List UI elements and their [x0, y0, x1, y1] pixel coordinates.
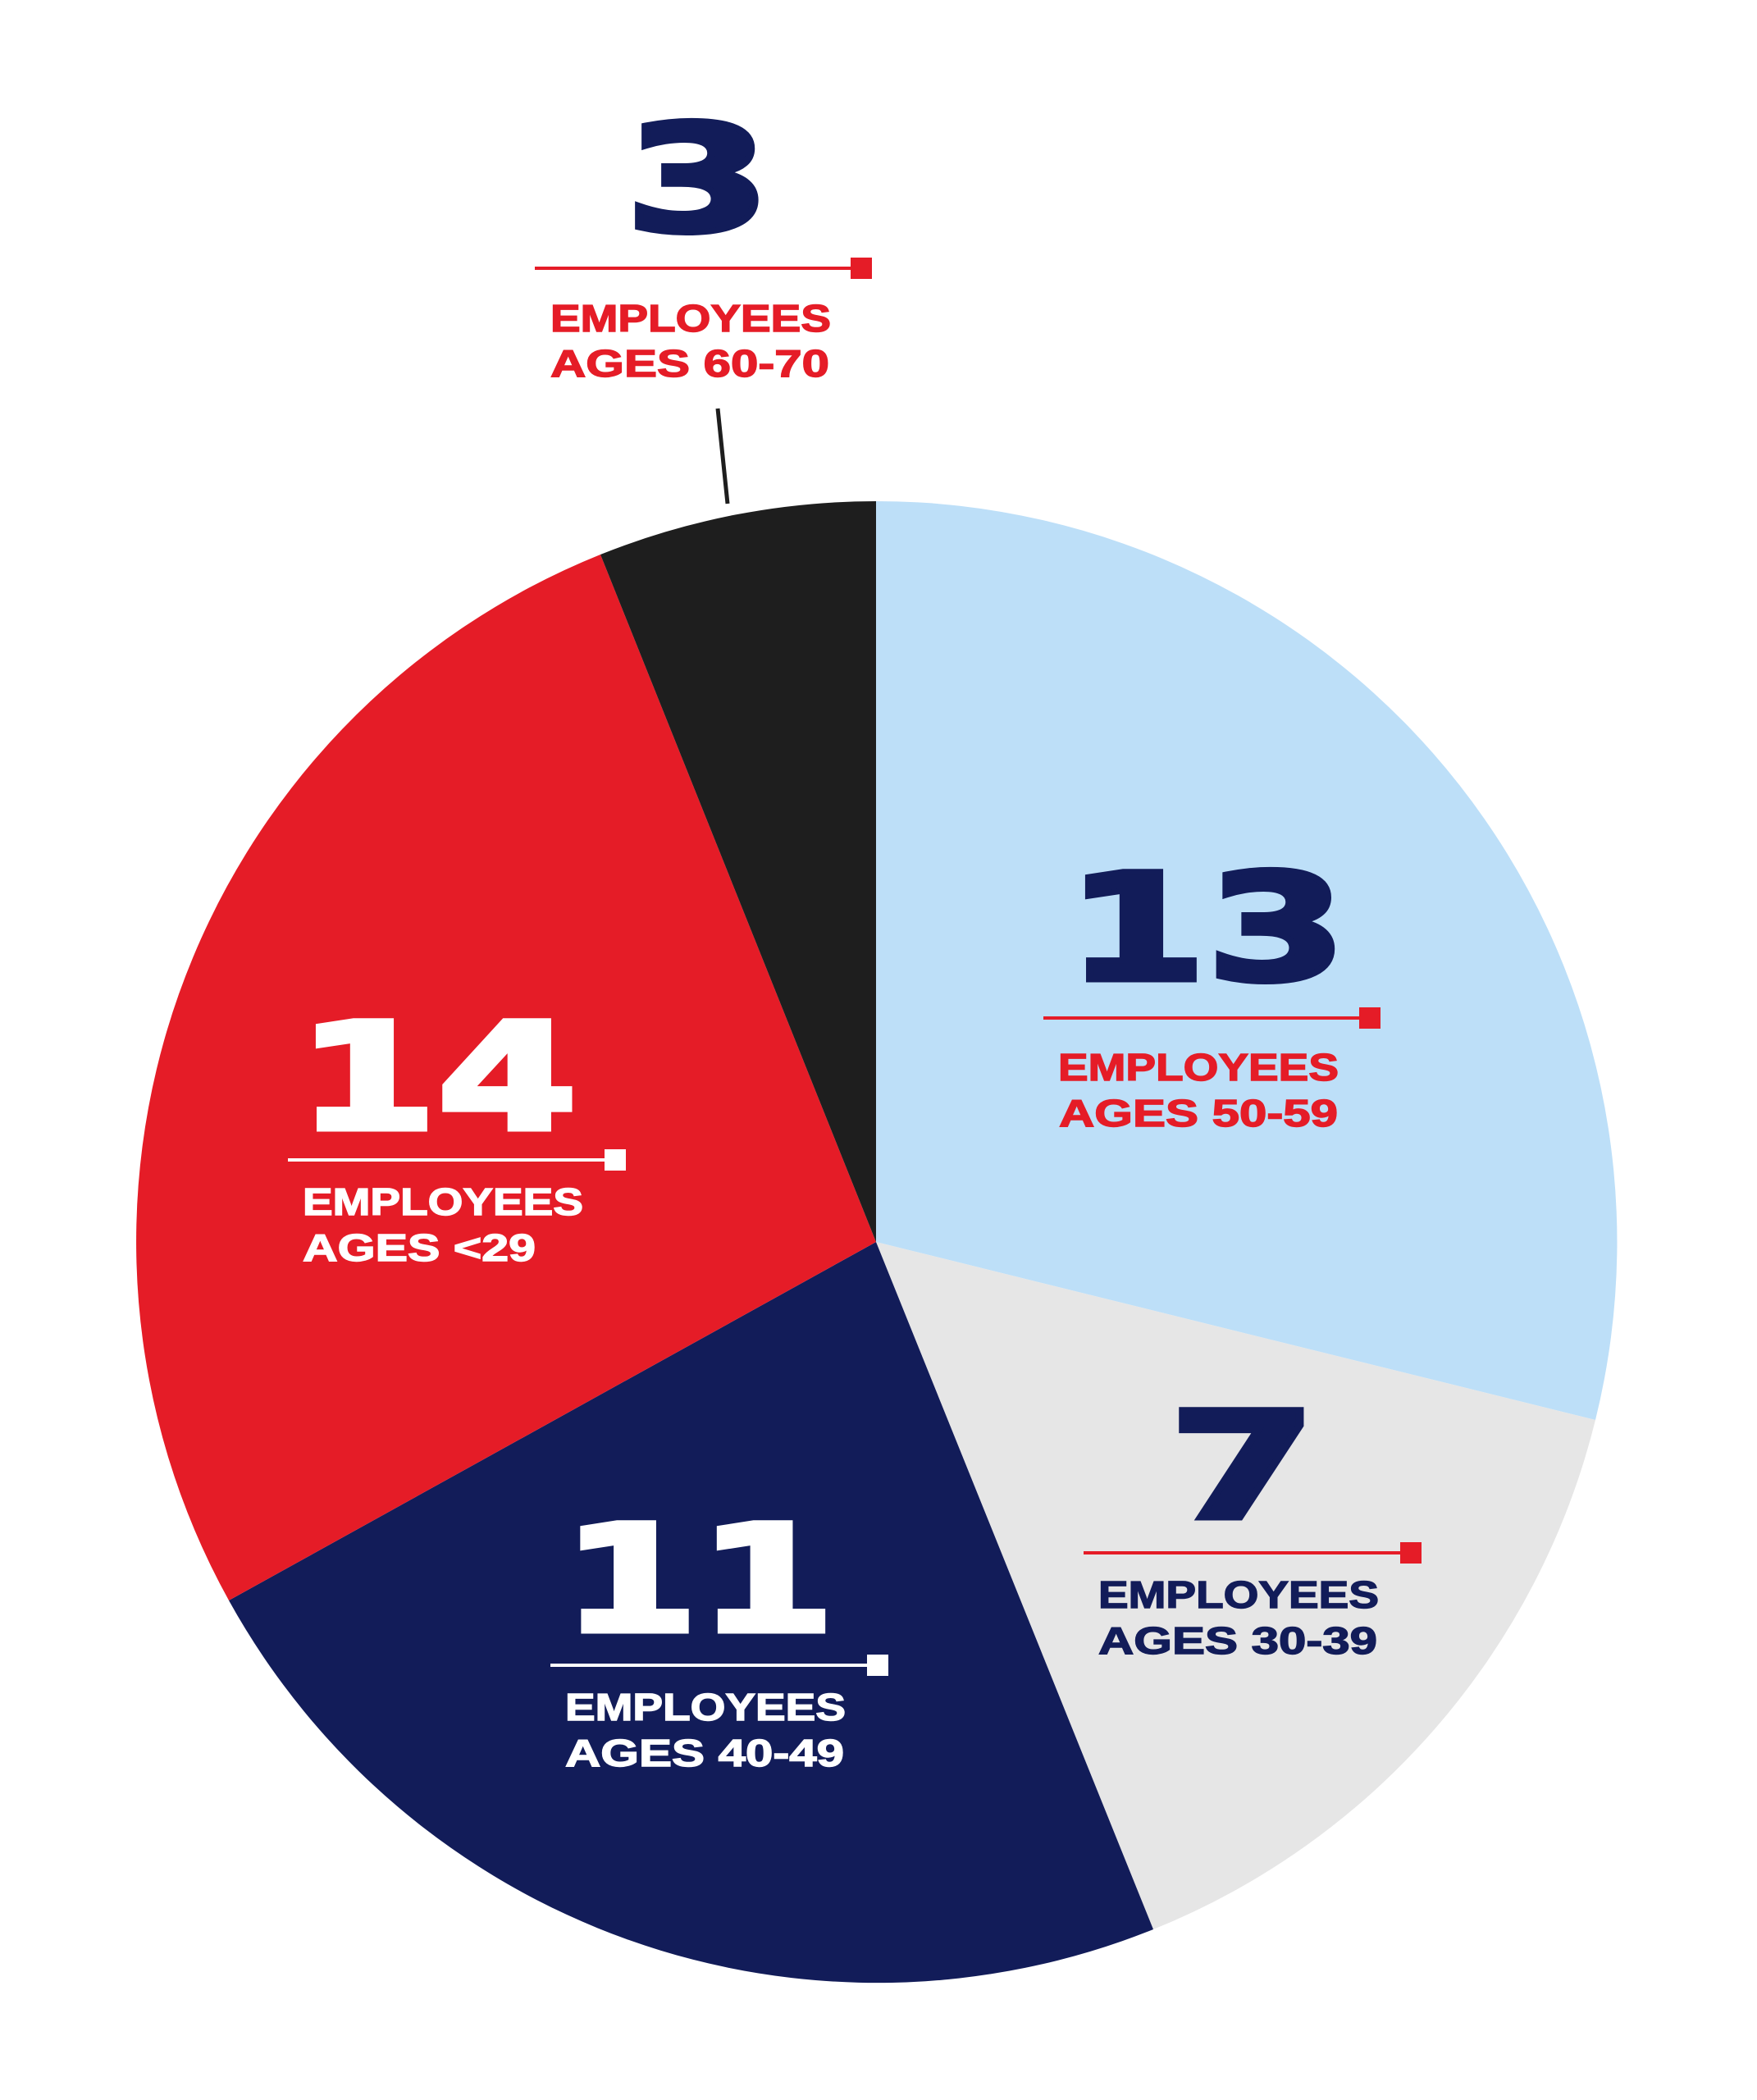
slice: ages 40-49 — [229, 1242, 1153, 1983]
number 11: 11 — [562, 1495, 835, 1666]
label: AGES 30-39 — [1098, 1619, 1377, 1662]
number 14: 14 — [297, 993, 577, 1164]
callout: ages 40-49 — [550, 1495, 888, 1774]
number 13: 13 — [1066, 843, 1347, 1015]
slice: ages 60-70 — [600, 501, 876, 1242]
label: EMPLOYEES — [1098, 1573, 1379, 1616]
label — [1058, 1046, 1339, 1134]
callout: ages 50-59 — [1043, 843, 1380, 1134]
slice: ages 50-59 — [876, 501, 1617, 1420]
pie chart — [136, 501, 1617, 1983]
slice: ages 30-39 — [876, 1242, 1595, 1929]
label: AGES 40-49 — [565, 1732, 844, 1774]
rule with square marker — [550, 1655, 888, 1676]
label — [550, 297, 831, 385]
slice: ages under 29 — [136, 555, 876, 1600]
number 3: 3 — [625, 94, 771, 266]
label: AGES <29 — [303, 1226, 536, 1269]
label: AGES 60-70 — [550, 342, 829, 385]
label: EMPLOYEES — [565, 1686, 846, 1728]
rule with square marker — [288, 1149, 626, 1171]
label — [303, 1180, 583, 1269]
label: EMPLOYEES — [550, 297, 831, 340]
label — [565, 1686, 846, 1774]
callout: ages 30-39 — [1084, 1381, 1422, 1662]
callout: ages under 29 — [288, 993, 626, 1269]
label: EMPLOYEES — [1058, 1046, 1339, 1089]
rule with square marker — [1084, 1542, 1422, 1564]
rule with square marker — [535, 258, 872, 279]
number 7: 7 — [1169, 1381, 1317, 1553]
label: EMPLOYEES — [303, 1180, 583, 1223]
rule with square marker — [1043, 1007, 1380, 1029]
callout: ages 60-70 — [535, 94, 872, 385]
label — [1098, 1573, 1379, 1662]
leader line: ages 60-70 — [718, 409, 728, 504]
label: AGES 50-59 — [1059, 1092, 1338, 1134]
